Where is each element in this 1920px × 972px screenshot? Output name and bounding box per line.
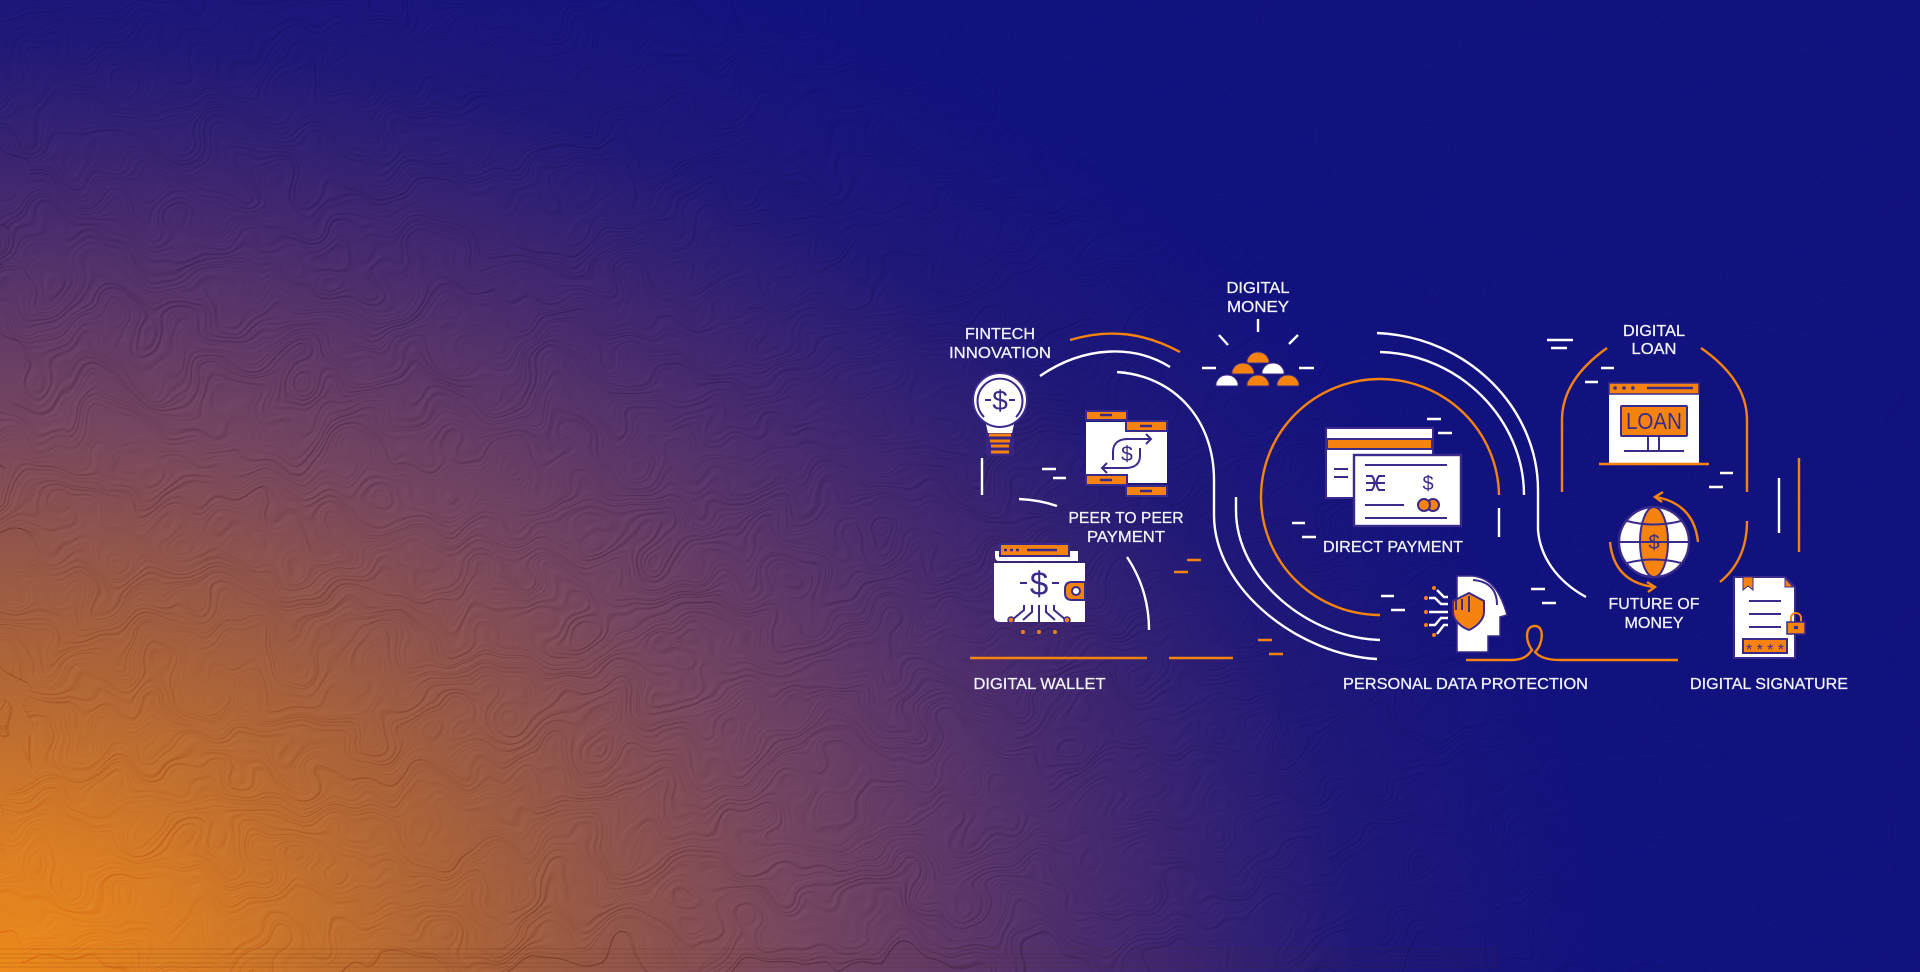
label: future of money (1608, 596, 1700, 632)
icon: peer to peer phones: $ (1121, 443, 1133, 466)
label: digital money (1226, 280, 1290, 316)
icon: digital signature document (1734, 577, 1805, 659)
connecting curves: orange (970, 334, 1799, 660)
white dashes (1042, 340, 1733, 610)
icon: digital wallet: $ (1030, 565, 1048, 602)
bottom horizontal bands (0, 949, 1500, 967)
icon: direct payment cards (1326, 428, 1461, 526)
label: future of money: MONEY (1624, 615, 1684, 632)
label: fintech innovation (949, 326, 1051, 362)
label: digital signature: DIGITAL SIGNATURE (1690, 676, 1848, 693)
label: peer to peer payment (1068, 510, 1184, 546)
label: personal data protection: PERSONAL DATA PROTECTION (1343, 676, 1588, 693)
label: digital money: MONEY (1227, 299, 1289, 316)
connecting curves: white (982, 333, 1779, 659)
icon: lightbulb (973, 373, 1027, 456)
label: fintech innovation: INNOVATION (949, 345, 1051, 362)
icon: personal data protection head (1424, 576, 1507, 652)
icon: gold bars (1216, 352, 1299, 386)
label: peer to peer payment: PEER TO PEER (1068, 510, 1184, 527)
label: future of money: FUTURE OF (1608, 596, 1700, 613)
orange dashes (1174, 560, 1283, 654)
label: digital loan: LOAN (1632, 341, 1676, 358)
icon: lightbulb: $ (992, 385, 1008, 416)
icon: direct payment cards: $ (1422, 473, 1434, 495)
label: peer to peer payment: PAYMENT (1087, 529, 1165, 546)
label: digital wallet: DIGITAL WALLET (974, 676, 1106, 693)
label: digital loan (1623, 323, 1685, 358)
icon: digital signature document: **** (1746, 642, 1784, 659)
icon: globe future of money: $ (1648, 532, 1660, 554)
label: digital loan: DIGITAL (1623, 323, 1685, 340)
label: fintech innovation: FINTECH (965, 326, 1035, 343)
icon: money rays (1202, 319, 1314, 368)
icon: peer to peer phones (1086, 411, 1167, 496)
icon: digital loan screen (1599, 383, 1709, 464)
icon: digital wallet (994, 544, 1085, 634)
icon: digital loan screen: LOAN (1626, 408, 1682, 434)
label: digital money: DIGITAL (1226, 280, 1290, 297)
icon: globe future of money (1610, 492, 1698, 592)
label: direct payment: DIRECT PAYMENT (1323, 539, 1463, 556)
